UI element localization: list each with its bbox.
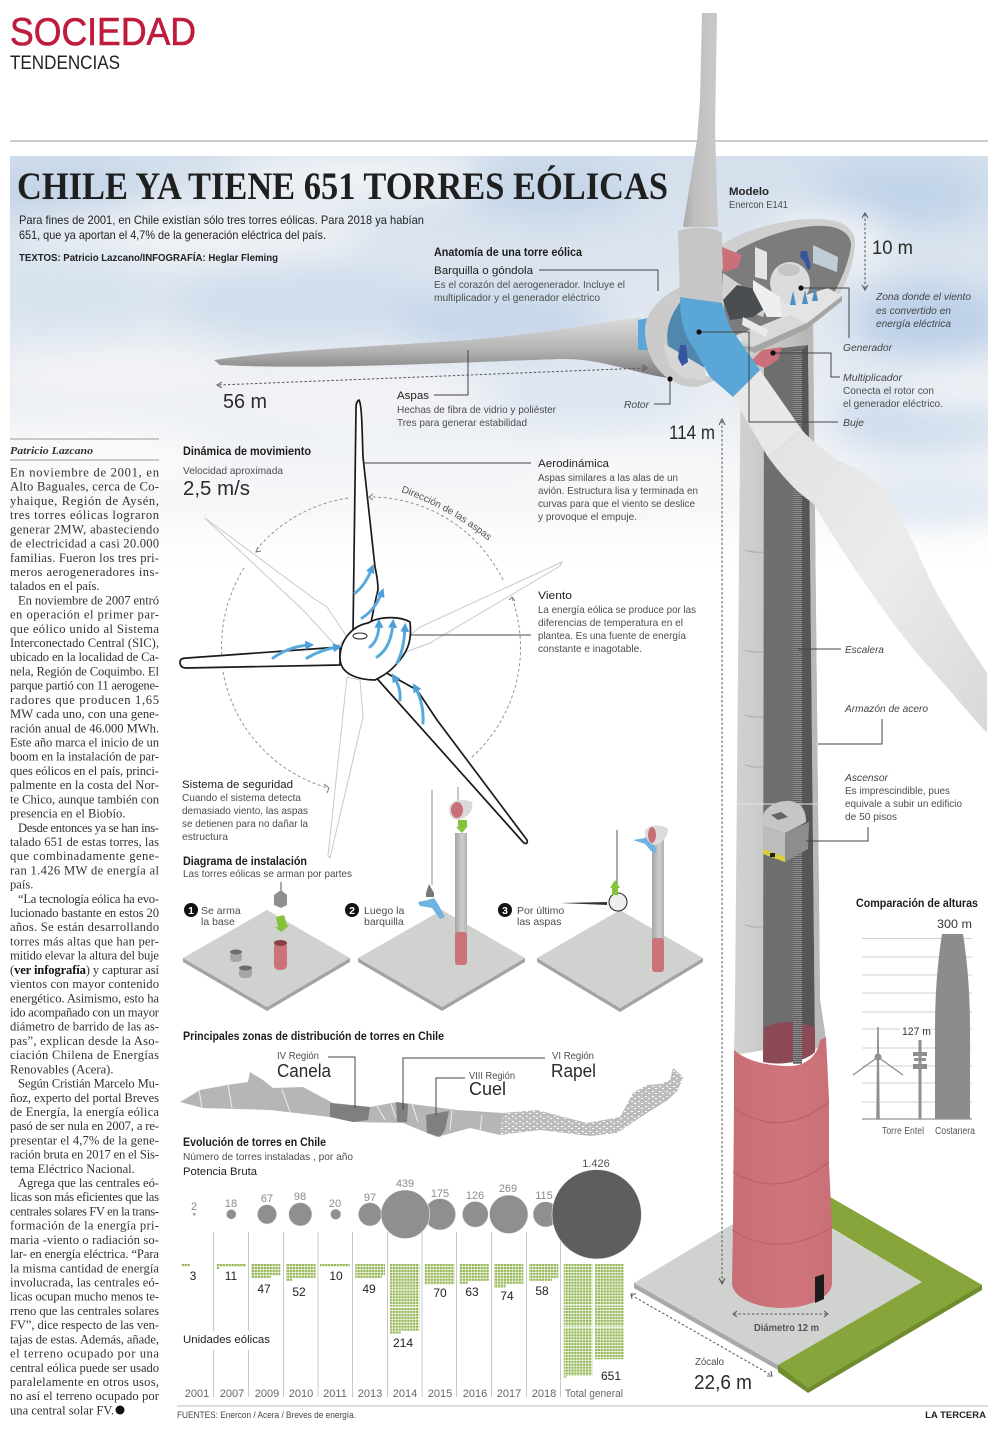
year axis: 2014 [393,1388,417,1400]
icon: turbine [853,1027,903,1119]
label: zona [875,291,971,330]
label: aspas: Tres para generar estabilidad [397,417,527,429]
step 3: las aspas [517,916,561,928]
article body text: Agrega que las centrales eó- [18,1176,159,1190]
chart headings: Número de torres instaladas , por año [183,1151,353,1163]
year axis [185,1388,623,1400]
article body text: Interconectado Central (SIC), [10,636,159,650]
vertical blade [678,13,722,303]
pink concrete base of tower [634,1037,982,1393]
heading: diagrama: Las torres eólicas se arman por partes [183,868,352,880]
label: aerodinámica: y provoque el empuje. [538,511,637,523]
dimension: 10 m [862,213,913,290]
label: rotor: Rotor [624,399,649,411]
label: aspas: Aspas [397,390,430,402]
label: multiplicador: Multiplicador [843,372,902,384]
article body text: en operación el primer par- [10,608,159,622]
label: aspas: Hechas de fibra de vidrio y poliéster [397,404,556,416]
article body text: el terreno ocupado por una [10,1347,159,1361]
article body text: lar- en energía eléctrica. “Para [10,1247,159,1261]
main wind turbine illustration [214,13,987,1393]
step 2 [345,787,525,1011]
label: sistema de seguridad: Cuando el sistema detecta [182,792,301,804]
step 1 [183,882,350,1011]
label: zócalo: 22,6 m [694,1372,752,1394]
article body text: rreno que las centrales solares [10,1304,159,1318]
unit values: 63 [465,1285,479,1299]
article body text: Alto Baguales, cerca de Co- [10,480,159,494]
foundation slab and lawn [634,1197,982,1393]
article body text: “La tecnología eólica ha evo- [18,892,159,906]
bubble values: 2 [191,1201,197,1213]
chart: evolution of towers [182,1137,641,1400]
label: modelo: Modelo [729,186,769,198]
heading: dinámica: 2,5 m/s [183,478,250,500]
label: rotor [624,376,673,411]
label: ascensor: de 50 pisos [845,811,897,823]
unit values: 214 [393,1336,413,1350]
label: modelo: Enercon E141 [729,199,788,211]
article body text: ubicado en la localidad de Ca- [10,650,159,664]
label: zona: energía eléctrica [876,318,951,330]
article body text: mitido elevar la altura del buje [10,949,159,963]
article body text: vientos con mayor contenido [10,977,159,991]
article body text: que eólico unido al Sistema [10,622,159,636]
article body text: energético. Asimismo, esto ha [10,991,159,1005]
label: armazón [818,703,928,744]
year axis: 2013 [358,1388,382,1400]
label: ascensor: Es imprescindible, pues [845,785,950,797]
step 3: 3 [502,905,508,917]
elevator [762,801,809,862]
article body text: ran 1.426 MW de energía al [10,863,160,877]
label: multiplicador: Conecta el rotor con [843,385,934,397]
label: viento: La energía eólica se produce por las [538,604,696,616]
article body text: que combinadamente gene- [10,849,159,863]
callout: Rapel: Rapel [551,1061,596,1081]
rotation arrows [218,486,521,794]
installation diagram [183,787,703,1012]
article body text: de Energía, la energía eólica [10,1105,159,1119]
label: aerodinámica: avión. Estructura lisa y terminada en [538,485,698,497]
callout: Cuel [436,1070,515,1115]
dimension: 10 m: 10 m [872,237,913,259]
unit values: 58 [535,1284,549,1298]
comparison of heights chart: Torre Entel [882,1126,924,1137]
article body text: En noviembre de 2001, en [10,466,160,480]
comparison of heights chart: 127 m [902,1026,931,1038]
label: aerodinámica: Aspas similares a las alas de un [538,472,678,484]
article body text: familias. Fueron los tres pri- [10,551,159,565]
label: anatomía: Barquilla o góndola [434,265,534,277]
article body text: presencia en el Biobío. [10,807,125,821]
label: zona: Zona donde el viento [875,291,971,303]
wind arrows [273,568,423,723]
article body text: yhaique, Región de Aysén, [10,494,159,508]
unit values: 10 [329,1269,343,1283]
sky background [0,153,1000,578]
year axis: 2001 [185,1388,209,1400]
article body text: central eólica puede ser usado [10,1361,159,1375]
unit values: 70 [433,1286,447,1300]
unit values [190,1269,621,1383]
section header [10,11,196,74]
intro text: TEXTOS: Patricio Lazcano/INFOGRAFÍA: Heglar Fleming [19,251,278,264]
bubble values: 20 [329,1198,341,1210]
article body text: talados en el país. [10,579,100,593]
intro text: Para fines de 2001, en Chile existían sólo tres torres eólicas. Para 2018 ya habían [19,213,424,227]
article body text: Este año marca el inicio de un [10,736,160,750]
year axis: 2011 [323,1388,347,1400]
step 3: Por último [517,905,564,917]
section header: TENDENCIAS [10,52,120,74]
rotor and hub [638,283,760,397]
article body text: pasó de ser nula en 2007, a re- [10,1119,159,1133]
dimension: 114 m [669,419,725,1284]
step 2: barquilla [364,916,404,928]
article body text: de electricidad a casi 20.000 [10,537,159,551]
bubble values: 67 [261,1193,273,1205]
label: viento: diferencias de temperatura en el [538,617,683,629]
label: generador [798,285,892,354]
bubble values [191,1158,610,1213]
label: diámetro: Diámetro 12 m [754,1322,819,1334]
callout: Canela: Canela [277,1061,332,1081]
article body text: ración anual de 46.000 MWh. [10,721,159,735]
footer [177,1406,988,1421]
article body text: diámetro de barrido de las as- [10,1020,159,1034]
intro text [19,213,424,264]
label: aerodinámica: curvas para que el viento se deslice [538,498,695,510]
icon: Torre Entel [913,1040,927,1119]
rotation arrows: Dirección de las aspas [402,486,491,540]
chart headings: Potencia Bruta [183,1166,258,1178]
label: armazón: Armazón de acero [844,703,928,715]
article body text: nela, Región de Coquimbo. El [10,664,160,678]
bold turbine [180,400,527,843]
article body text: tres torres eólicas lograron [10,508,160,522]
label: modelo [729,186,788,211]
bubble values: 18 [225,1198,237,1210]
article body text: paralelamente en otros usos, [10,1375,159,1389]
article body text: tema Eléctrico Nacional. [10,1162,135,1176]
article body text: MW cada uno, con una gene- [10,707,159,721]
label: sistema de seguridad: se detienen para no dañar la [182,818,308,830]
ghost blades [205,518,562,858]
footer: FUENTES: Enercon / Acera / Breves de energía. [177,1410,356,1421]
heading: dinámica [183,446,311,500]
label: viento: plantea. Es una fuente de energía [538,630,686,642]
article body text: pas”, explican desde la Aso- [10,1034,159,1048]
label: diámetro [733,1311,828,1334]
horizontal blade [214,317,668,378]
article body text: ración bruta en 2017 en el Sis- [10,1148,159,1162]
label: sistema de seguridad: Sistema de seguridad [182,779,293,791]
label: escalera [798,644,884,656]
label: escalera: Escalera [845,644,884,656]
article body text: (ver infografía) y capturar así [10,963,160,977]
bubble values: 439 [396,1178,414,1190]
article body text: ciación Chilena de Energías [10,1048,159,1062]
label: ascensor: equivale a subir un edificio [845,798,962,810]
year axis: 2017 [497,1388,521,1400]
article body text: tajas de estas. Además, añade, [10,1332,159,1346]
unit values: 74 [500,1289,514,1303]
article body text: lucionado bastante en estos 20 [10,906,159,920]
step 2: Luego la [364,905,404,917]
article body text: Desde entonces ya se han ins- [18,821,159,835]
label: buje [696,329,864,429]
step 1: Se arma [201,905,241,917]
chart: evolution of towers: Unidades eólicas [183,1334,271,1346]
label: aspas [397,350,556,429]
motion dynamics diagram [179,399,563,859]
year axis: 2007 [220,1388,244,1400]
bar: Costanera [935,934,970,1119]
unit values: 49 [362,1282,376,1296]
unit values: 11 [225,1269,238,1283]
map silhouette [180,1068,683,1137]
article body text: torres más altas que han per- [10,934,159,948]
section header: SOCIEDAD [10,11,196,54]
comparison of heights chart: Comparación de alturas [856,898,978,910]
article body text: palmente en la costa del Nor- [10,778,159,792]
label: viento [538,590,696,655]
label: anatomía: Es el corazón del aerogenerador. Incluye el [434,279,625,291]
column dividers [214,1232,560,1397]
bubble values: 115 [535,1190,553,1202]
article body text: radores que producen 1,65 [10,693,159,707]
article body text: FV”, dice respecto de las ven- [10,1318,159,1332]
year axis: 2016 [463,1388,487,1400]
bubble values: 97 [364,1192,376,1204]
article body text: Renovables (Acera). [10,1062,114,1076]
heading: dinámica: Velocidad aproximada [183,465,283,477]
comparison of heights chart: Costanera [935,1126,975,1137]
article byline: Patricio Lazcano [10,445,94,457]
article body text: presentar el 4,7% de la gene- [10,1133,159,1147]
comparison of heights chart: 300 m [937,917,972,931]
article body text: generar 2MW, abasteciendo [10,522,159,536]
callout: Cuel: Cuel [469,1079,506,1099]
article body text: ido acompañado con un mayor [10,1006,160,1020]
article body text: licas son más eficientes que las [10,1190,159,1204]
dimension: 114 m: 114 m [669,422,715,444]
label: sistema de seguridad [182,779,308,843]
dimension: 56 m: 56 m [223,391,267,413]
label: anatomía: Anatomía de una torre eólica [434,247,583,259]
article body text: país. [10,878,33,892]
article body text: meros aerogeneradores ins- [10,565,159,579]
label: sistema de seguridad: estructura [182,831,228,843]
unit values: 3 [190,1269,197,1283]
article body text: parque partió con 11 aerogene- [10,679,159,693]
article body text: la misma cantidad de energía [10,1261,159,1275]
callout: Canela [277,1050,355,1108]
article body text: una central solar FV. [10,1403,114,1417]
label: aerodinámica [538,458,698,523]
unit values: 47 [257,1282,271,1296]
step 2: 2 [349,905,355,917]
article body text: boom en la instalación de par- [10,750,159,764]
intro text: 651, que ya aportan el 4,7% de la generación eléctrica del país. [19,228,326,242]
heading: diagrama: Diagrama de instalación [183,856,307,868]
callout: Canela: IV Región [277,1050,319,1062]
callout: Rapel: VI Región [552,1050,594,1062]
label: multiplicador: el generador eléctrico. [843,398,943,410]
label: buje: Buje [843,417,864,429]
article body text: involucrada, las centrales eó- [10,1276,159,1290]
step 1: 1 [188,905,194,917]
bubble values: 269 [499,1183,517,1195]
article body text: ñoz, experto del portal Breves [10,1091,159,1105]
bubble values: 1.426 [582,1158,610,1170]
label: viento: constante e inagotable. [538,643,642,655]
heading: dinámica: Dinámica de movimiento [183,446,311,458]
article body text: no así el terreno ocupado por [10,1389,160,1403]
year axis: 2018 [532,1388,556,1400]
article body text: En noviembre de 2007 entró [18,593,159,607]
label: generador: Generador [843,342,892,354]
waffle bars: wind units [182,1264,624,1378]
step 1: la base [201,916,235,928]
label: ascensor: Ascensor [844,772,888,784]
bubbles: gross power [193,1170,641,1259]
bubble values: 98 [294,1191,306,1203]
title: CHILE YA TIENE 651 TORRES EÓLICAS [17,164,668,208]
heading: diagrama [183,856,352,880]
map: wind zones in Chile [180,1031,683,1137]
label: ascensor [806,772,962,841]
callout: Rapel [403,1050,596,1110]
comparison of heights chart [853,898,978,1137]
footer: LA TERCERA [925,1410,986,1421]
map: wind zones in Chile: Principales zonas de distribución de torres en Chile [183,1031,444,1043]
step 3 [498,825,703,1012]
article body text: licas ocupan mucho menos te- [10,1290,159,1304]
bubble values: 175 [431,1188,449,1200]
unit values: 651 [601,1369,621,1383]
label: multiplicador [770,350,943,410]
label: anatomía [434,247,658,304]
label: viento: Viento [538,590,572,602]
label: zona: es convertido en [876,305,951,317]
label: zócalo: Zócalo [695,1356,724,1368]
nacelle [720,219,855,368]
chart headings: Evolución de torres en Chile [183,1137,326,1149]
article body text [10,466,160,1417]
article body text: Según Cristián Marcelo Mu- [18,1077,159,1091]
article body text: ques eólicos en el país, princi- [10,764,159,778]
chart headings [183,1137,353,1178]
tower steel shaft [734,320,826,1064]
label: anatomía: multiplicador y el generador eléctrico [434,292,600,304]
lower right blade [732,370,987,733]
unit values: 52 [292,1285,306,1299]
dimension: 56 m [217,365,647,413]
article body text: centrales solares FV en la trans- [10,1204,159,1218]
article body text: te Chico, aunque también con [10,792,160,806]
year axis: 2010 [289,1388,313,1400]
bubble values: 126 [466,1190,484,1202]
year axis: 2009 [255,1388,279,1400]
article body text: talado 651 de estas torres, las [10,835,159,849]
article body text: maria -viento o radiación so- [10,1233,159,1247]
article body text: formación de la energía pri- [10,1219,159,1233]
worker [800,251,811,270]
year axis: Total general [565,1388,623,1400]
callout: Cuel: VIII Región [469,1070,515,1082]
label: zócalo [631,1294,772,1394]
label: aerodinámica: Aerodinámica [538,458,610,470]
label: sistema de seguridad: demasiado viento, las aspas [182,805,308,817]
article body text: años. Se están desarrollando [10,920,159,934]
year axis: 2015 [428,1388,452,1400]
